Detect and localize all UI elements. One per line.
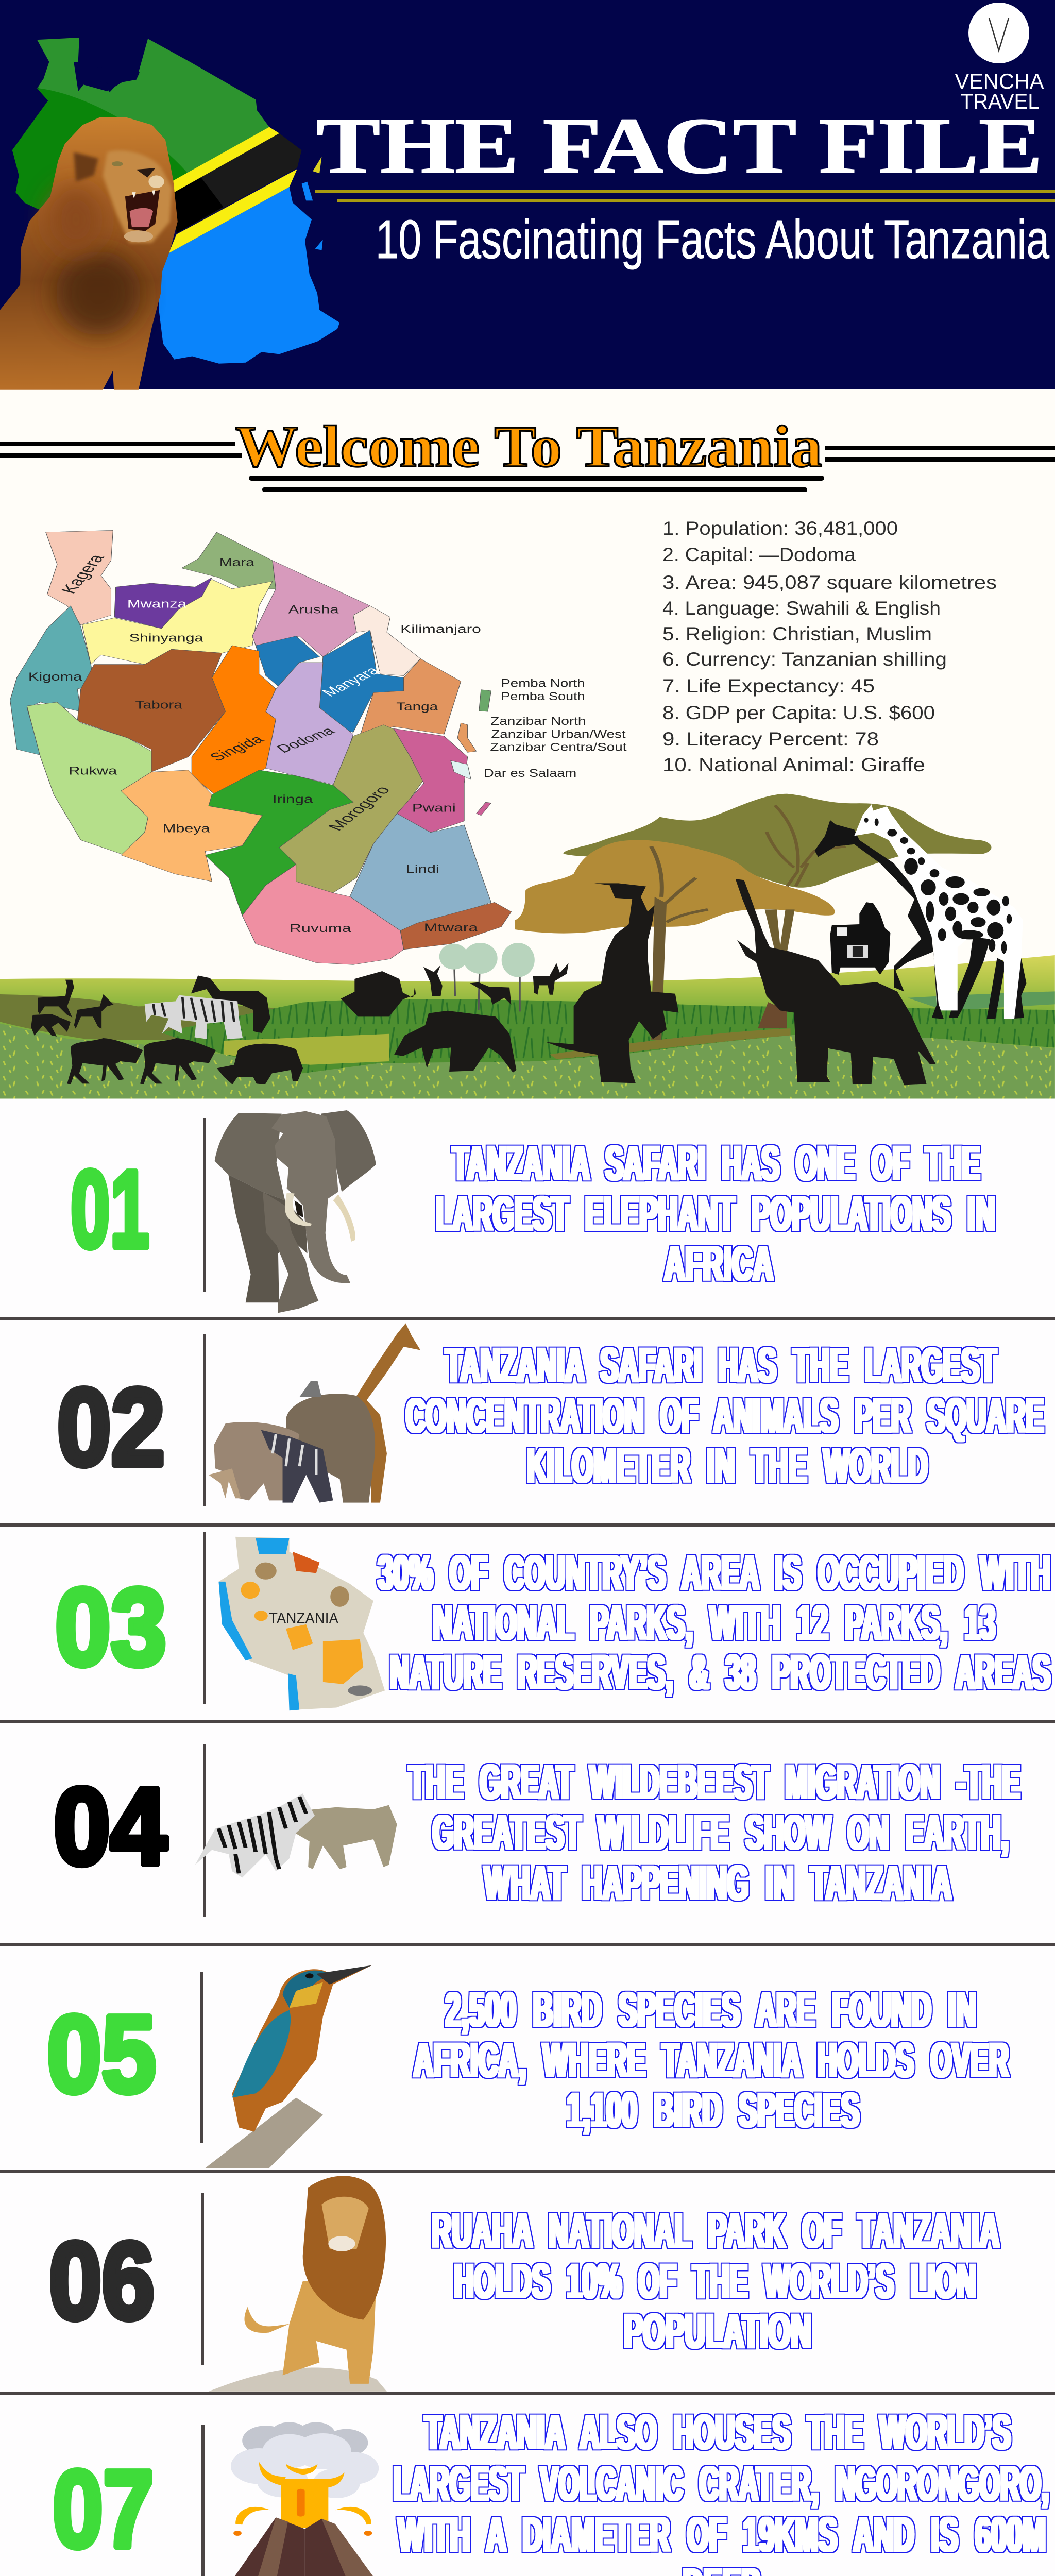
fact text 03	[378, 1546, 1051, 1700]
key statistics list: 8. GDP per Capita: U.S. $600	[662, 702, 935, 723]
region labels: Tabora	[135, 698, 182, 711]
number 03: 03	[55, 1566, 166, 1688]
fact text 05	[414, 1982, 1009, 2138]
icon: erupting volcano	[207, 2422, 402, 2576]
number 01: 01	[71, 1148, 149, 1270]
Vencha Travel logo	[955, 3, 1044, 113]
number 06: 06	[49, 2219, 155, 2342]
region labels: Dodoma	[273, 724, 338, 755]
region labels: Zanzibar Centra/Sout	[490, 740, 627, 753]
icon: zebra and wildebeest	[195, 1793, 397, 1878]
welcome heading	[0, 414, 1055, 492]
key statistics list: 1. Population: 36,481,000	[662, 518, 898, 539]
region labels: Dar es Salaam	[484, 767, 576, 779]
icon: safari animals	[209, 1323, 420, 1503]
region labels: Morogoro	[324, 784, 394, 833]
key statistics list	[662, 518, 997, 775]
region labels: Mara	[219, 556, 254, 569]
region labels: Pemba North	[501, 676, 585, 689]
row 01	[71, 1110, 996, 1313]
key statistics list: 9. Literacy Percent: 78	[662, 728, 879, 750]
region labels: Manyara	[318, 664, 383, 699]
fact text 04	[409, 1755, 1020, 1910]
region labels: Ruvuma	[290, 922, 351, 935]
region labels	[28, 552, 627, 935]
row 04	[54, 1744, 1020, 1917]
region labels: Singida	[206, 733, 267, 764]
key statistics list: 3. Area: 945,087 square kilometres	[662, 572, 997, 593]
savanna wildlife scene top	[0, 794, 1055, 1098]
region labels: Shinyanga	[129, 631, 203, 644]
region labels: Mwanza	[127, 598, 186, 610]
fact text 06	[432, 2204, 1000, 2359]
number 04: 04	[54, 1765, 167, 1887]
region labels: Iringa	[273, 792, 313, 805]
icon: national parks map	[218, 1537, 385, 1710]
number 02: 02	[57, 1366, 165, 1488]
header banner	[0, 0, 1055, 390]
region labels: Zanzibar North	[490, 715, 586, 727]
region labels: Kagera	[57, 552, 109, 596]
region labels: Zanzibar Urban/West	[491, 727, 626, 740]
number 07: 07	[53, 2448, 154, 2570]
row 07	[53, 2405, 1049, 2576]
Vencha Travel logo: VENCHA	[955, 69, 1044, 93]
row 02	[57, 1323, 1044, 1506]
icon: elephant	[215, 1110, 376, 1313]
icon: standing lion	[209, 2176, 387, 2392]
region labels: Pemba South	[501, 690, 585, 703]
key statistics list: 2. Capital: —Dodoma	[662, 544, 856, 565]
regions map of Tanzania	[10, 530, 627, 964]
key statistics list: 10. National Animal: Giraffe	[662, 754, 925, 775]
facts panel background	[0, 1099, 1055, 2576]
region labels: Kilimanjaro	[400, 623, 481, 636]
welcome heading: Welcome To Tanzania	[235, 414, 822, 479]
fact text 06: POPULATION	[624, 2304, 812, 2359]
fact text 02	[406, 1338, 1044, 1493]
region labels: Rukwa	[69, 764, 117, 777]
Vencha Travel logo: TRAVEL	[960, 89, 1040, 113]
region labels: Kigoma	[28, 670, 82, 683]
region labels: Lindi	[406, 862, 439, 875]
region labels: Pwani	[412, 801, 456, 814]
key statistics list: 7. Life Expectancy: 45	[662, 675, 875, 697]
key statistics list: 5. Religion: Christian, Muslim	[662, 623, 932, 645]
key statistics list: 4. Language: Swahili & English	[662, 598, 941, 619]
icon: kingfisher	[205, 1965, 372, 2168]
Tanzania flag map	[12, 38, 339, 364]
region labels: Tanga	[396, 700, 438, 713]
fact text 07	[394, 2405, 1049, 2576]
roaring lion	[0, 117, 178, 390]
number 05: 05	[47, 1993, 156, 2115]
fact text 01: AFRICA	[665, 1236, 774, 1291]
region labels: Arusha	[288, 603, 339, 616]
row 06	[49, 2176, 1000, 2392]
fact text 01	[436, 1136, 996, 1291]
title: THE FACT FILE	[316, 101, 1043, 190]
row 03	[55, 1532, 1051, 1710]
icon: national parks map: TANZANIA	[269, 1610, 338, 1627]
region labels: Mtwara	[424, 921, 478, 934]
region labels: Mbeya	[163, 822, 210, 835]
key statistics list: 6. Currency: Tanzanian shilling	[662, 649, 947, 670]
row 05	[47, 1965, 1009, 2168]
